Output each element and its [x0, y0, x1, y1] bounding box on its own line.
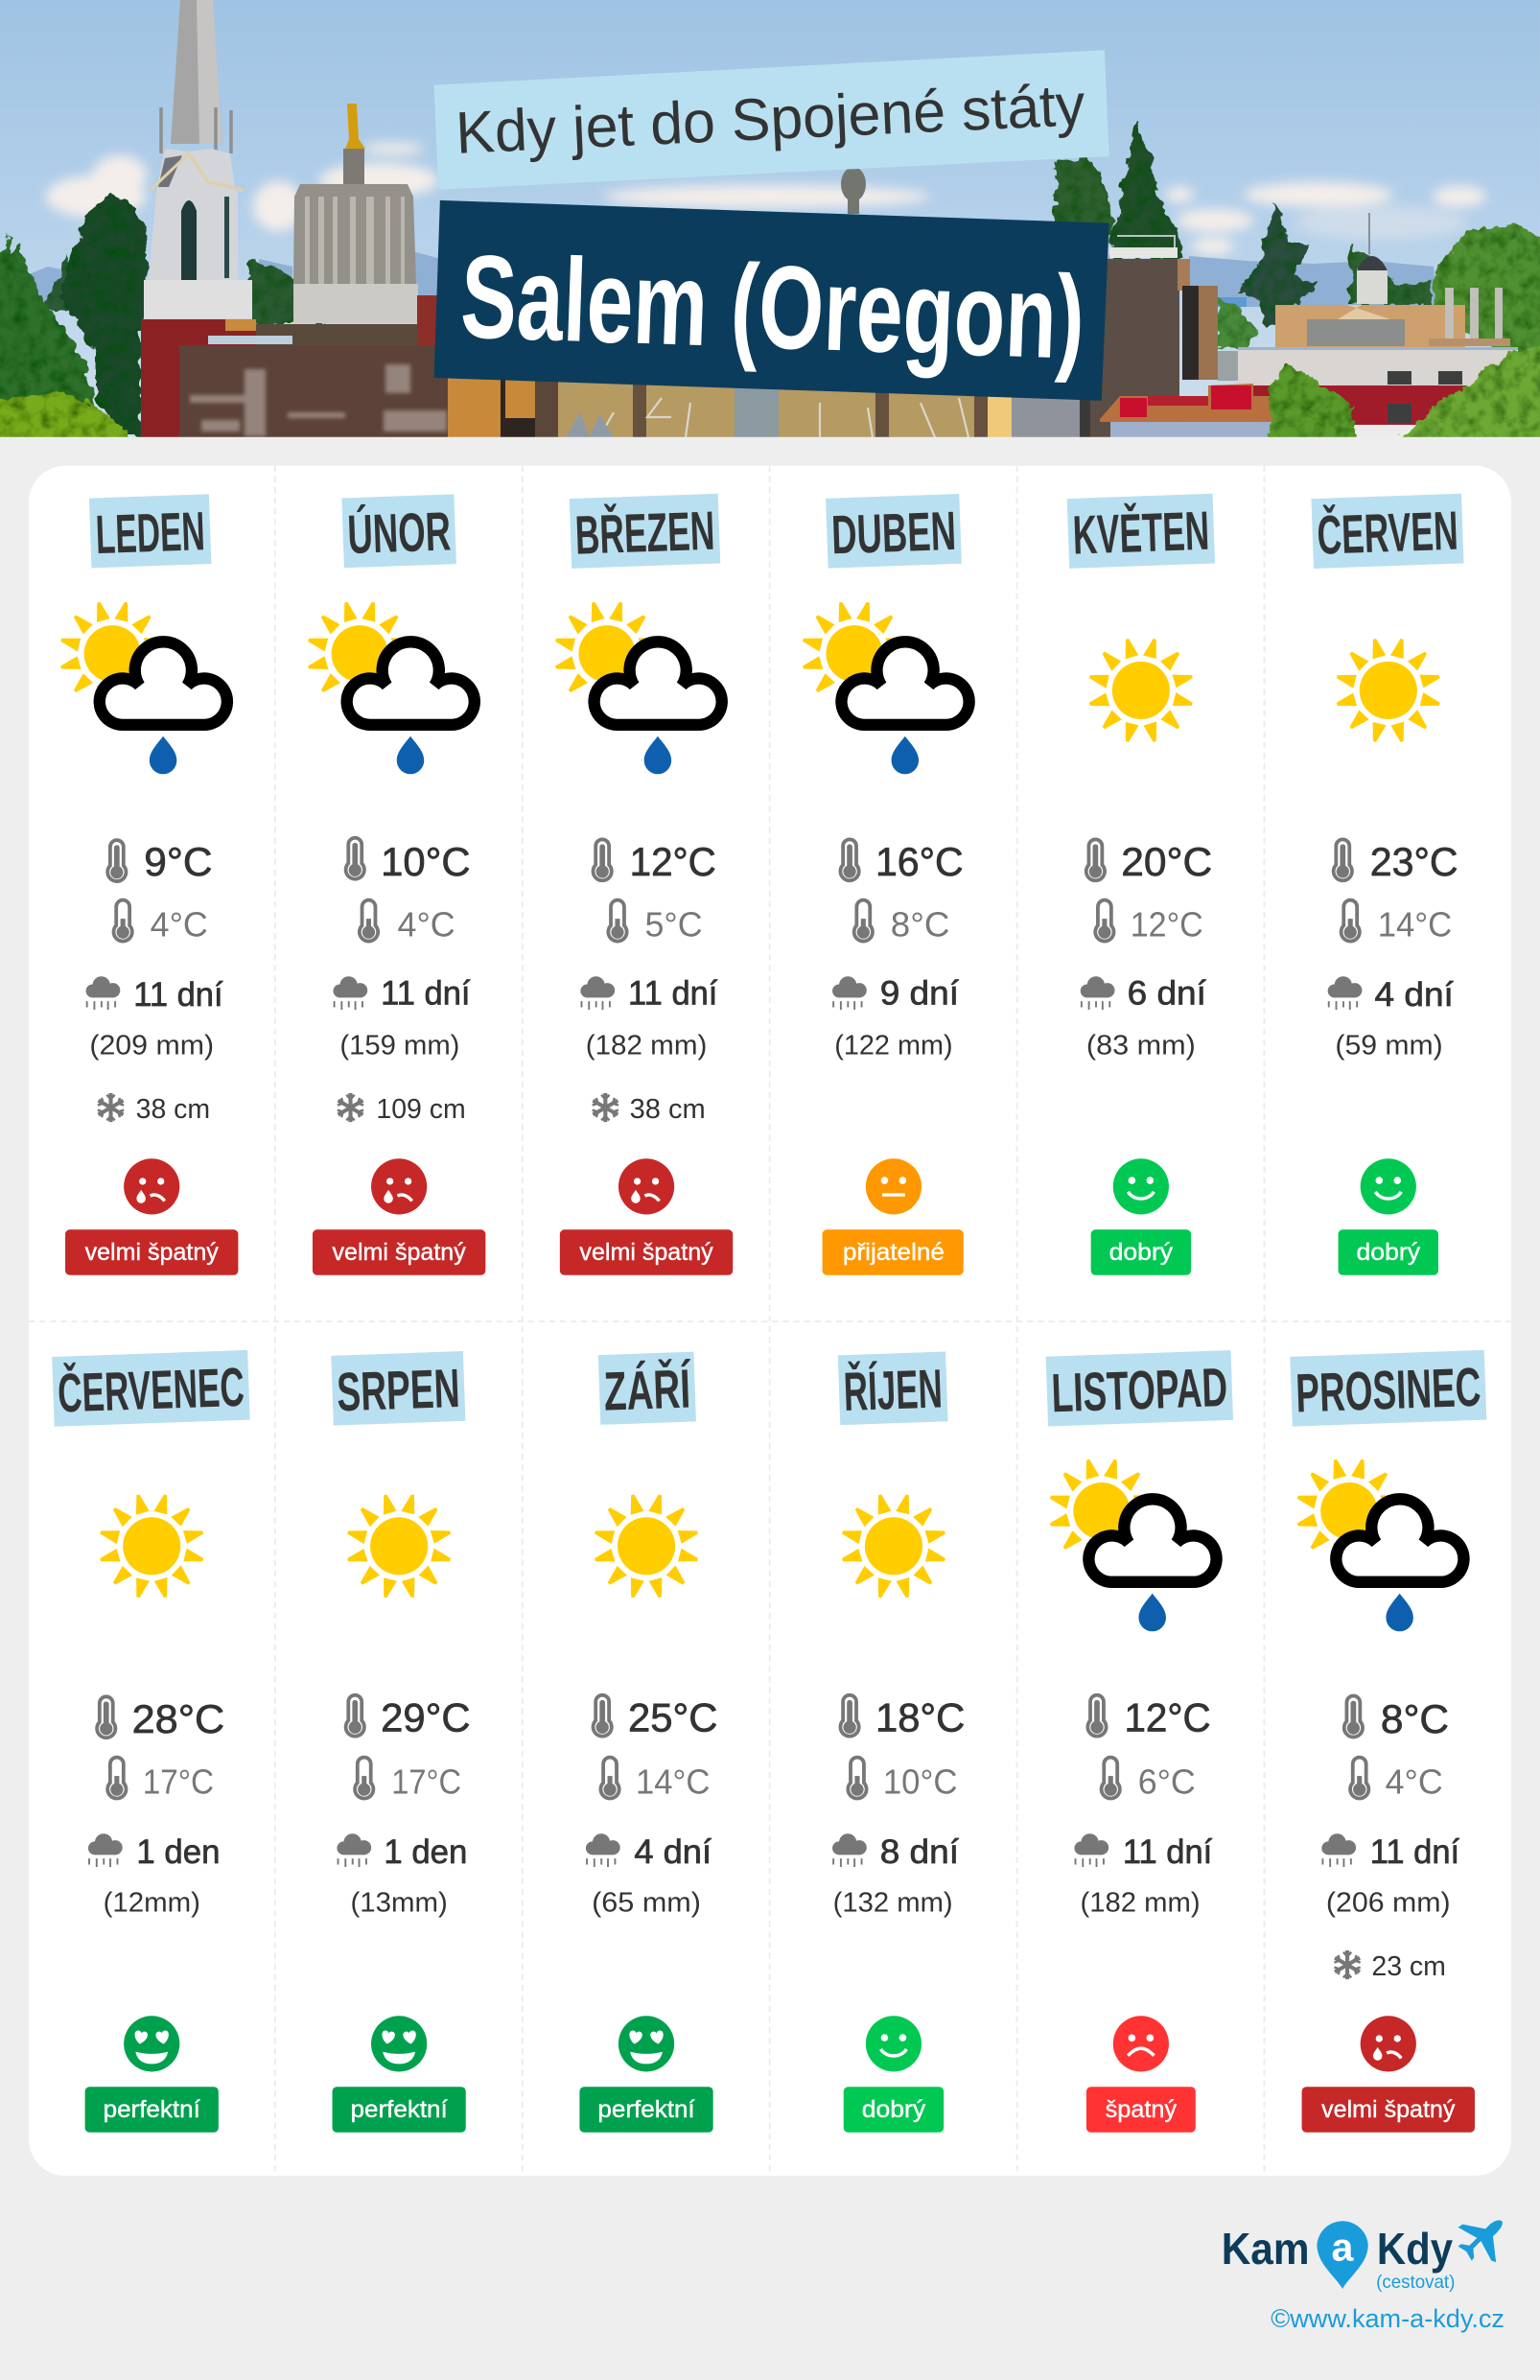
panel: ZÁŘÍ: 25°C — [628, 1694, 717, 1739]
panel: ÚNOR: velmi špatný — [333, 1239, 466, 1266]
panel: PROSINEC: 11 dní — [1370, 1833, 1459, 1871]
panel: ČERVEN: 23°C — [1370, 839, 1458, 884]
panel: SRPEN: (13mm) — [351, 1888, 448, 1919]
panel: PROSINEC: 4°C — [1386, 1762, 1443, 1801]
panel: KVĚTEN — [1067, 494, 1215, 1275]
logo: Kam a Kdy: Kdy — [1377, 2224, 1453, 2274]
panel: ČERVEN: 4 dní — [1375, 976, 1454, 1014]
panel: ÚNOR: 10°C — [381, 839, 471, 884]
title banner: Salem (Oregon) — [458, 230, 1086, 385]
panel: KVĚTEN: dobrý — [1109, 1239, 1173, 1266]
panel: BŘEZEN: (182 mm) — [586, 1031, 707, 1062]
panel: ŘÍJEN: ŘÍJEN — [843, 1357, 944, 1423]
panel: ČERVEN: (59 mm) — [1335, 1031, 1443, 1062]
source url: ©www.kam-a-kdy.cz — [1271, 2304, 1505, 2333]
panel: DUBEN: přijatelné — [843, 1239, 945, 1266]
panel: ČERVEN: dobrý — [1357, 1239, 1420, 1266]
logo: Kam a Kdy: (cestovat) — [1376, 2272, 1455, 2293]
panel: ŘÍJEN: dobrý — [862, 2096, 926, 2123]
panel: ÚNOR: 109 cm — [376, 1094, 466, 1125]
panel: PROSINEC: 8°C — [1381, 1696, 1449, 1741]
panel: LISTOPAD: špatný — [1106, 2096, 1177, 2123]
panel: PROSINEC: 23 cm — [1371, 1951, 1446, 1982]
panel: ŘÍJEN: 10°C — [883, 1762, 957, 1801]
panel: ŘÍJEN: 8 dní — [880, 1833, 959, 1871]
panel: ČERVEN — [1311, 494, 1464, 1275]
roofs and brick building — [256, 324, 419, 345]
panel: LISTOPAD: LISTOPAD — [1051, 1357, 1228, 1424]
panel: BŘEZEN: BŘEZEN — [574, 500, 715, 567]
panel: DUBEN — [802, 494, 969, 1275]
panel: SRPEN: SRPEN — [336, 1358, 461, 1423]
panel: LEDEN: 11 dní — [133, 976, 223, 1014]
panel: KVĚTEN: 12°C — [1131, 904, 1203, 944]
panel: BŘEZEN — [554, 494, 733, 1275]
panel: ÚNOR: 11 dní — [381, 974, 471, 1012]
panel: ČERVENEC: 28°C — [132, 1696, 224, 1741]
panel: LEDEN: 9°C — [144, 839, 213, 884]
panel: ŘÍJEN — [832, 1351, 965, 2133]
panel: LISTOPAD — [1046, 1350, 1233, 2133]
panel: LEDEN: LEDEN — [95, 501, 206, 566]
panel: LISTOPAD: 6°C — [1138, 1762, 1196, 1801]
panel: ZÁŘÍ: (65 mm) — [592, 1888, 701, 1919]
panel: ÚNOR: 4°C — [398, 904, 455, 944]
panel: ÚNOR: (159 mm) — [339, 1031, 459, 1062]
church tower — [171, 0, 222, 144]
panel: DUBEN: DUBEN — [830, 501, 957, 566]
capitol — [343, 149, 364, 184]
panel: LISTOPAD: 12°C — [1124, 1694, 1211, 1739]
lower buildings — [448, 364, 1090, 437]
panel: BŘEZEN: velmi špatný — [579, 1239, 713, 1266]
panel: SRPEN — [331, 1351, 471, 2133]
right tower — [1109, 247, 1178, 258]
panel: LEDEN: velmi špatný — [85, 1239, 219, 1266]
panel: ČERVENEC: (12mm) — [104, 1888, 200, 1919]
panel: DUBEN: 9 dní — [880, 974, 959, 1012]
panel: DUBEN: (122 mm) — [834, 1031, 953, 1062]
panel: ZÁŘÍ: 14°C — [636, 1762, 711, 1801]
panel: LISTOPAD: (182 mm) — [1081, 1888, 1201, 1919]
panel: ŘÍJEN: (132 mm) — [833, 1888, 953, 1919]
panel: PROSINEC: (206 mm) — [1326, 1888, 1451, 1919]
panel: ZÁŘÍ: ZÁŘÍ — [603, 1358, 693, 1423]
panel: BŘEZEN: 38 cm — [630, 1094, 706, 1125]
panel: KVĚTEN: (83 mm) — [1086, 1031, 1196, 1062]
subtitle banner — [434, 50, 1109, 190]
panel: ČERVEN: 14°C — [1378, 904, 1452, 944]
header photo: Salem skyline — [0, 0, 1540, 451]
panel: DUBEN: 16°C — [875, 839, 964, 884]
panel: ČERVENEC: ČERVENEC — [57, 1356, 245, 1425]
panel: KVĚTEN: 6 dní — [1128, 974, 1206, 1012]
panel: ZÁŘÍ: perfektní — [597, 2096, 695, 2123]
panel: SRPEN: 1 den — [384, 1833, 467, 1871]
panel: ZÁŘÍ — [579, 1352, 717, 2133]
logo: Kam a Kdy: a — [1332, 2226, 1355, 2270]
subtitle banner: Kdy jet do Spojené státy — [455, 72, 1086, 167]
right buildings — [1275, 305, 1465, 350]
panel: ČERVEN: ČERVEN — [1316, 500, 1459, 567]
title banner — [434, 200, 1109, 401]
panel: SRPEN: 17°C — [391, 1762, 461, 1801]
panel: ČERVENEC — [52, 1350, 250, 2133]
panel: SRPEN: 29°C — [381, 1694, 471, 1739]
panel: KVĚTEN: KVĚTEN — [1072, 500, 1210, 567]
panel: PROSINEC — [1290, 1350, 1486, 2133]
panel: ZÁŘÍ: 4 dní — [634, 1833, 712, 1871]
panel: ČERVENEC: 1 den — [136, 1833, 220, 1871]
panel: BŘEZEN: 12°C — [630, 839, 716, 884]
panel: SRPEN: perfektní — [351, 2096, 448, 2123]
panel: LEDEN: (209 mm) — [89, 1031, 214, 1062]
panel: months card — [29, 466, 1511, 2176]
panel: PROSINEC: velmi špatný — [1321, 2096, 1456, 2123]
panel: KVĚTEN: 20°C — [1121, 839, 1212, 884]
logo: Kam a Kdy — [1222, 2220, 1503, 2293]
panel: ÚNOR — [307, 494, 485, 1275]
panel: LISTOPAD: 11 dní — [1123, 1833, 1213, 1871]
panel: BŘEZEN: 5°C — [644, 904, 703, 944]
panel: LEDEN — [59, 494, 238, 1275]
panel: ČERVENEC: perfektní — [104, 2096, 200, 2123]
water tower — [841, 167, 866, 201]
logo: Kam a Kdy: Kam — [1222, 2224, 1309, 2274]
panel: ČERVENEC: 17°C — [143, 1762, 214, 1801]
panel: ÚNOR: ÚNOR — [346, 501, 452, 566]
panel: LEDEN: 4°C — [151, 904, 208, 944]
panel: BŘEZEN: 11 dní — [628, 974, 718, 1012]
panel: ŘÍJEN: 18°C — [875, 1694, 965, 1739]
panel: DUBEN: 8°C — [891, 904, 949, 944]
panel: LEDEN: 38 cm — [136, 1094, 210, 1125]
